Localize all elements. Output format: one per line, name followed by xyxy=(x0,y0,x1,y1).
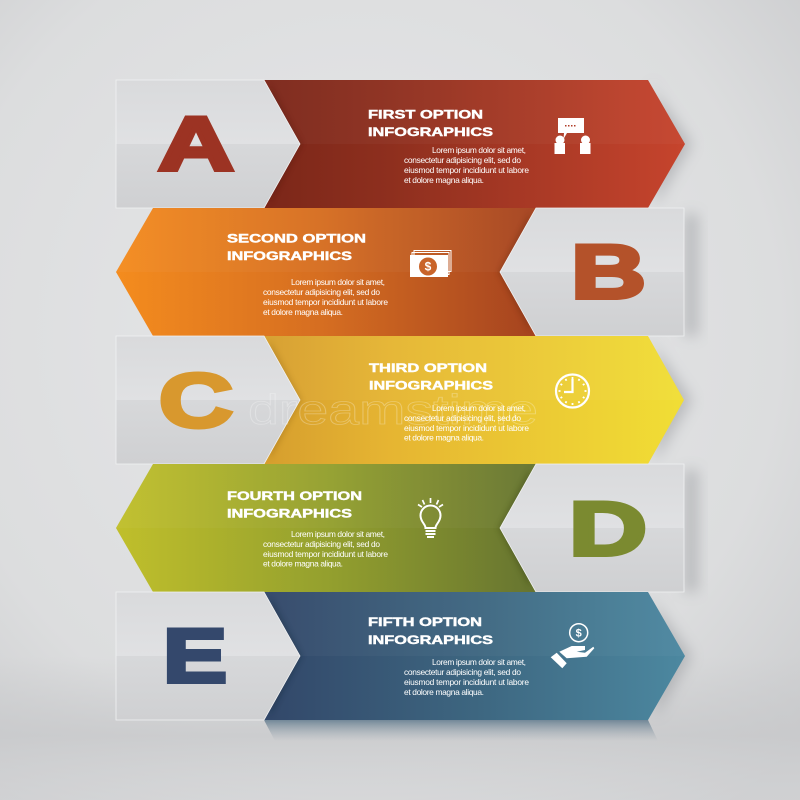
body text C: Lorem ipsum dolor sit amet, xyxy=(432,403,526,413)
body text B xyxy=(263,277,388,317)
colored arrow C xyxy=(264,336,684,464)
letter A: A xyxy=(158,102,234,187)
heading: third option: THIRD OPTION xyxy=(369,361,487,375)
heading: fifth option: INFOGRAPHICS xyxy=(368,633,493,647)
reflection under the fifth arrow xyxy=(264,720,658,741)
letter E: E xyxy=(163,614,227,699)
body text D: eiusmod tempor incididunt ut labore xyxy=(263,549,388,559)
letter C: C xyxy=(159,359,233,444)
body text E: consectetur adipisicing elit, sed do xyxy=(404,667,521,677)
body text A: et dolore magna aliqua. xyxy=(404,175,484,185)
body text B: Lorem ipsum dolor sit amet, xyxy=(291,277,385,287)
icon: clock xyxy=(556,374,589,408)
icon: hand holding coin: $ xyxy=(576,628,582,640)
body text E: Lorem ipsum dolor sit amet, xyxy=(432,657,526,667)
heading: third option xyxy=(369,361,493,392)
letter D: D xyxy=(569,487,647,572)
row C: third option xyxy=(116,336,684,464)
heading: second option: INFOGRAPHICS xyxy=(227,249,352,263)
drop shadows behind the panels xyxy=(650,84,698,718)
colored arrow A xyxy=(264,80,685,208)
heading: fourth option: INFOGRAPHICS xyxy=(227,506,352,520)
heading: first option xyxy=(368,108,493,139)
row D: fourth option xyxy=(116,464,684,592)
letter B: B xyxy=(571,230,646,315)
heading: fourth option: FOURTH OPTION xyxy=(227,489,362,503)
body text A: eiusmod tempor incididunt ut labore xyxy=(404,165,529,175)
gray tab C xyxy=(116,336,302,464)
heading: third option: INFOGRAPHICS xyxy=(369,378,493,392)
gray tab D xyxy=(498,464,684,592)
watermark: dreamstime xyxy=(248,386,538,433)
heading: first option: INFOGRAPHICS xyxy=(368,125,493,139)
gray tab E xyxy=(116,592,302,720)
gray tab B xyxy=(498,208,684,336)
body text C: eiusmod tempor incididunt ut labore xyxy=(404,423,529,433)
body text E: eiusmod tempor incididunt ut labore xyxy=(404,677,529,687)
icon: light bulb xyxy=(418,498,443,537)
icon: banknotes: $ xyxy=(425,260,432,274)
heading: fifth option xyxy=(368,615,493,647)
body text D: Lorem ipsum dolor sit amet, xyxy=(291,529,385,539)
body text A: Lorem ipsum dolor sit amet, xyxy=(432,145,526,155)
body text A: consectetur adipisicing elit, sed do xyxy=(404,155,521,165)
colored arrow B xyxy=(116,208,536,336)
body text B: consectetur adipisicing elit, sed do xyxy=(263,287,380,297)
icon: hand holding coin xyxy=(551,624,594,668)
colored arrow E xyxy=(264,592,685,720)
body text B: et dolore magna aliqua. xyxy=(263,307,343,317)
body text E: et dolore magna aliqua. xyxy=(404,687,484,697)
icon: banknotes xyxy=(410,250,451,277)
body text A xyxy=(404,145,529,185)
heading: second option xyxy=(227,232,366,263)
body text E xyxy=(404,657,529,697)
body text C: et dolore magna aliqua. xyxy=(404,432,484,442)
body text D xyxy=(263,529,388,568)
heading: second option: SECOND OPTION xyxy=(227,232,366,246)
body text D: consectetur adipisicing elit, sed do xyxy=(263,539,380,549)
body text C xyxy=(404,403,529,442)
heading: fifth option: FIFTH OPTION xyxy=(368,615,482,629)
body text D: et dolore magna aliqua. xyxy=(263,558,343,568)
colored arrow D xyxy=(116,464,536,592)
heading: fourth option xyxy=(227,489,362,520)
row E: fifth option xyxy=(116,592,685,720)
body text B: eiusmod tempor incididunt ut labore xyxy=(263,297,388,307)
icon: two people talking xyxy=(554,118,590,154)
gray tab A xyxy=(116,80,302,208)
row A: first option xyxy=(116,80,685,208)
body text C: consectetur adipisicing elit, sed do xyxy=(404,413,521,423)
row B: second option xyxy=(116,208,684,336)
heading: first option: FIRST OPTION xyxy=(368,108,483,122)
